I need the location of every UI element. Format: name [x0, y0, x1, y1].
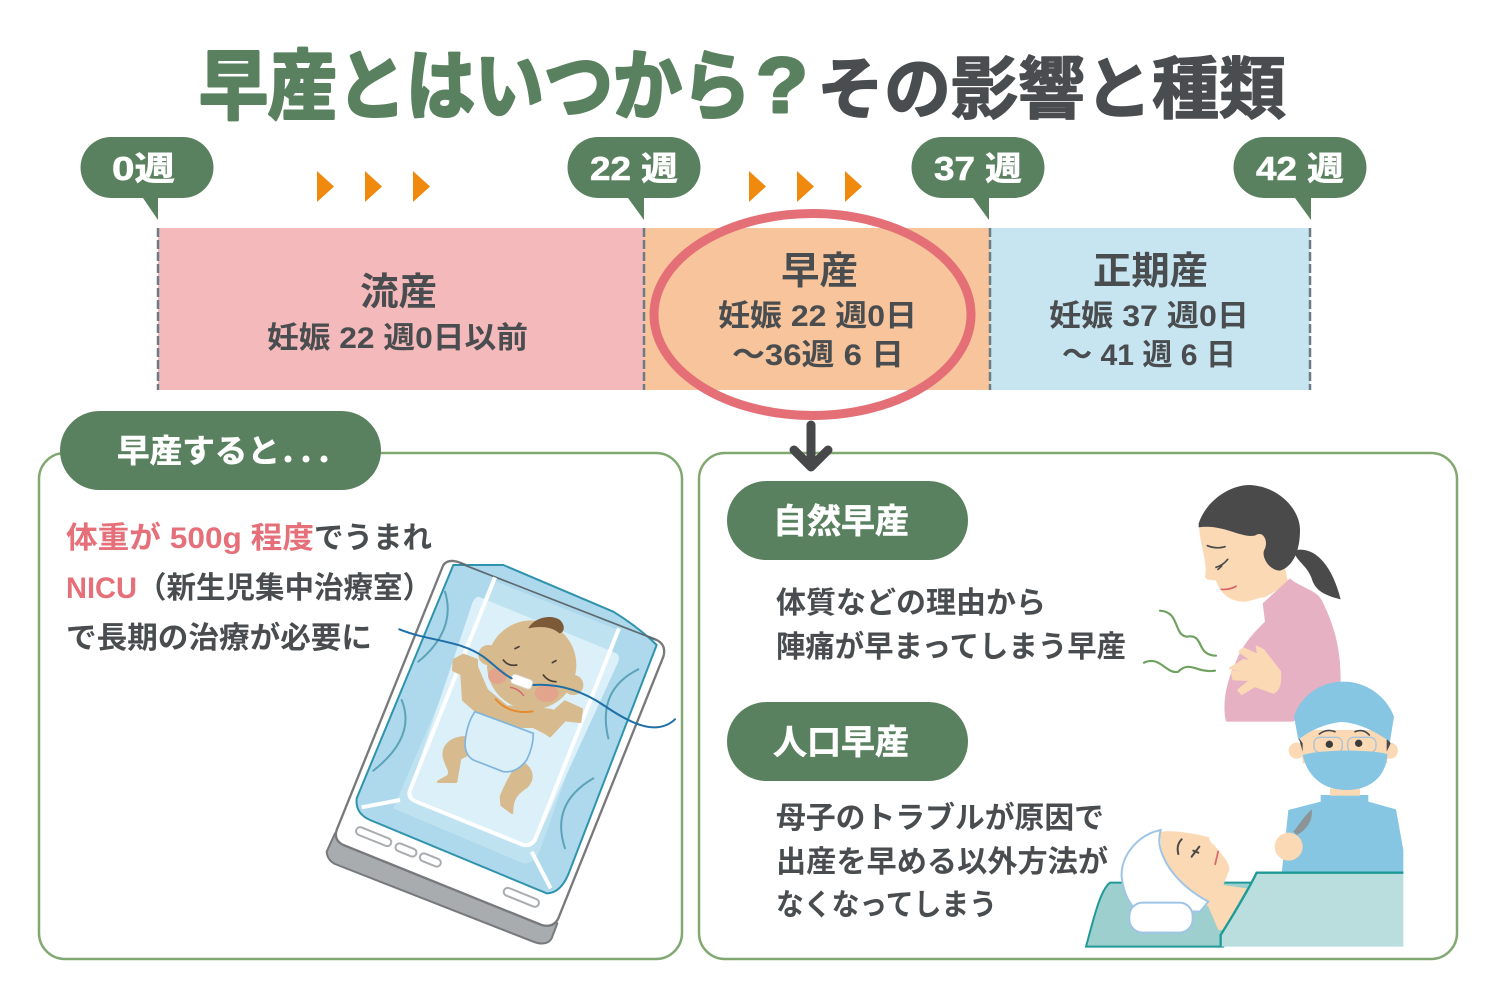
heading pill: induced premature birth: 人口早産	[773, 724, 909, 762]
ponytail	[1293, 550, 1341, 599]
pillow	[1129, 903, 1193, 933]
highlight ellipse around premature birth	[654, 214, 971, 416]
timeline bar: pink miscarriage segment: 流産	[360, 272, 437, 314]
text block: induced description: 出産を早める以外方法が	[776, 845, 1108, 879]
text block: effects: 体重が 500g 程度	[66, 521, 314, 555]
panel: types of premature birth	[699, 453, 1457, 959]
text block: induced description: 母子のトラブルが原因で	[776, 801, 1104, 835]
face lines	[1207, 546, 1228, 569]
timeline bar: orange premature birth segment	[644, 228, 990, 390]
text block: spontaneous description	[776, 587, 1126, 664]
text block: induced description: なくなってしまう	[776, 889, 997, 922]
incubator base	[327, 833, 557, 944]
text block: effects: （新生児集中治療室）	[137, 572, 432, 605]
heading pill: induced premature birth	[727, 702, 968, 781]
patient face	[1160, 831, 1247, 930]
doctor cap	[1294, 682, 1394, 742]
baby mouth shape	[496, 699, 533, 712]
callout: 0 weeks	[81, 137, 213, 220]
back sheet	[1086, 883, 1253, 947]
tray buttons	[355, 826, 540, 908]
nasal tube tape	[510, 673, 534, 690]
ear	[1253, 534, 1266, 553]
text block: effects: でうまれ	[314, 522, 432, 555]
baby cheeks	[488, 668, 507, 684]
neck and face	[1199, 523, 1288, 602]
timeline bar: pink miscarriage segment: 妊娠 22 週0日以前	[267, 322, 528, 355]
hand	[1230, 647, 1280, 694]
text block: effects: で長期の治療が必要に	[66, 621, 372, 655]
timeline bar: orange premature birth segment: 妊娠 22 週0日	[718, 300, 917, 333]
callout: 42 weeks	[1234, 137, 1366, 220]
hair	[1199, 485, 1300, 571]
callout: 22 weeks: 22 週	[590, 150, 678, 187]
title	[199, 41, 1286, 130]
text block: spontaneous description: 陣痛が早まってしまう早産	[776, 630, 1126, 664]
patient headcover	[1122, 830, 1208, 912]
tray edge seen through cover	[460, 563, 655, 639]
panel: effects of premature birth	[39, 453, 682, 959]
handle port arcs	[373, 592, 638, 848]
timeline bar: orange premature birth segment: 〜36週 6 日	[732, 339, 904, 372]
callout: 22 weeks	[568, 137, 700, 220]
doctor eyes and glasses	[1319, 730, 1369, 735]
baby	[438, 622, 582, 813]
text block: effects	[66, 521, 432, 655]
text block: effects: NICU	[66, 572, 137, 605]
title: 早産とはいつから	[199, 45, 751, 130]
baby hair	[528, 617, 564, 633]
illustration: baby in incubator	[327, 561, 675, 944]
heading pill: spontaneous premature birth	[727, 481, 968, 560]
callout: 42 weeks: 42 週	[1256, 150, 1344, 187]
doctor body	[1282, 795, 1403, 873]
doctor head	[1289, 730, 1398, 763]
pain squiggles	[1144, 611, 1216, 672]
illustration: pregnant woman in pain	[1144, 485, 1341, 722]
sweater	[1224, 578, 1341, 722]
heading pill: spontaneous premature birth: 自然早産	[773, 503, 909, 541]
title: ?	[756, 41, 808, 129]
incubator cover	[356, 565, 657, 893]
timeline bar: blue full-term segment: 〜 41 週 6 日	[1062, 339, 1236, 372]
arrows: orange triangles toward 22 weeks	[317, 171, 430, 202]
callout: 37 weeks	[912, 137, 1044, 220]
timeline bar: blue full-term segment: 正期産	[1093, 251, 1208, 293]
tube	[399, 629, 675, 727]
doctor hand	[1275, 833, 1303, 861]
timeline bar: orange premature birth segment: 早産	[781, 251, 858, 293]
arrow: down to types panel	[794, 425, 828, 467]
callout: 0 weeks: 0週	[112, 150, 175, 187]
inner mattress	[410, 597, 619, 844]
title: その影響と種類	[817, 52, 1286, 128]
incubator tray	[336, 561, 664, 926]
diaper	[465, 712, 533, 772]
scalpel	[1293, 809, 1312, 835]
cover frame lines	[362, 577, 619, 888]
timeline bar: blue full-term segment	[990, 228, 1310, 390]
timeline bar: blue full-term segment: 妊娠 37 週0日	[1049, 300, 1249, 333]
callout: 37 weeks: 37 週	[934, 150, 1022, 187]
text block: spontaneous description: 体質などの理由から	[776, 587, 1046, 620]
patient face lines	[1178, 839, 1199, 857]
doctor mask	[1303, 751, 1387, 790]
baby face lines	[503, 647, 556, 682]
heading pill: after premature birth: 早産すると	[117, 433, 280, 469]
text block: induced description	[776, 801, 1108, 922]
arrows: orange triangles toward 37 weeks	[749, 171, 862, 202]
timeline bar: pink miscarriage segment	[158, 228, 644, 390]
illustration: doctor and patient	[1086, 682, 1403, 947]
heading pill: after premature birth	[60, 411, 381, 490]
front sheet	[1221, 873, 1403, 947]
